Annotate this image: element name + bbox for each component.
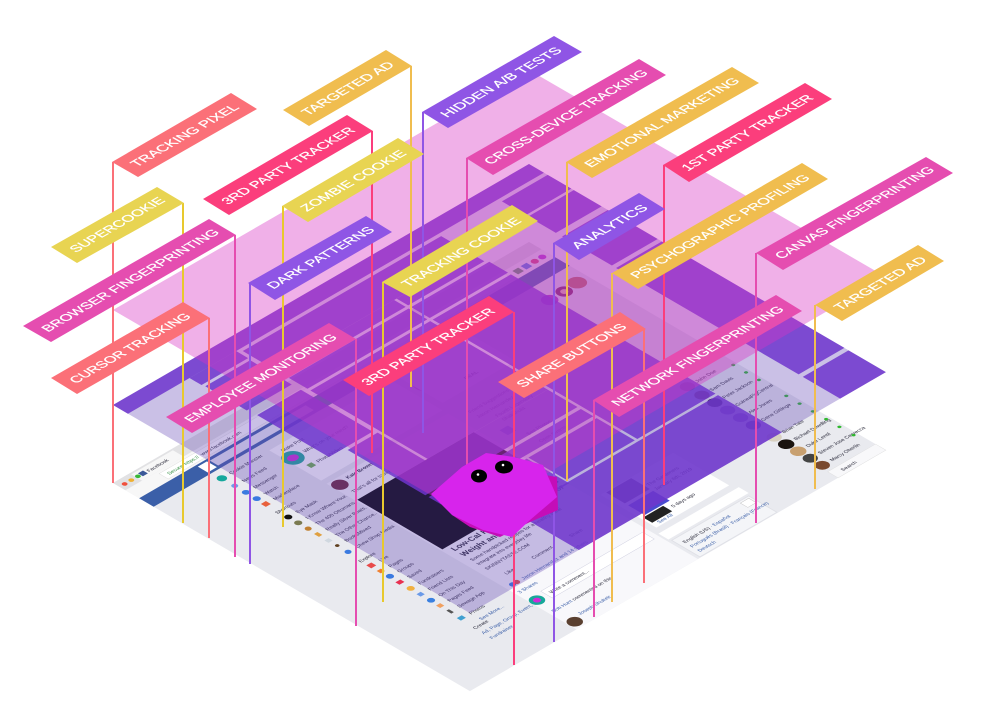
left navigation: Messenger xyxy=(252,474,280,490)
label: dark patterns xyxy=(248,216,392,300)
label: browser fingerprinting: BROWSER FINGERPRINTING xyxy=(38,227,223,334)
label: tracking pixel xyxy=(112,93,257,177)
right sidebar: stories and contacts: Gene Gittinge xyxy=(760,403,793,422)
top layer: translucent pink plane xyxy=(113,70,886,518)
label: analytics: ANALYTICS xyxy=(567,202,652,251)
label: cross-device tracking xyxy=(466,59,666,175)
left navigation: The 400 Ottomans xyxy=(314,501,358,526)
left navigation: On This Day xyxy=(437,580,468,598)
right sidebar: stories and contacts: Bichael Dowdling xyxy=(793,418,833,441)
label: share buttons xyxy=(498,312,646,398)
middle layer: translucent wireframe with violet blocks xyxy=(113,164,886,613)
label: targeted ad top xyxy=(283,50,412,126)
left navigation: Live xyxy=(377,555,391,563)
right column cards: Português (Brasil) · Français (France) xyxy=(689,501,771,549)
left navigation xyxy=(214,447,547,641)
left navigation: Really Silver Boats... xyxy=(324,504,372,532)
label: 3rd party tracker top: 3RD PARTY TRACKER xyxy=(217,125,359,206)
label: psychographic profiling xyxy=(612,163,828,289)
label: 3rd party tracker lower xyxy=(343,296,514,396)
label: targeted ad right xyxy=(815,245,944,321)
label: canvas fingerprinting: CANVAS FINGERPRINTING xyxy=(771,164,938,261)
label: network fingerprinting xyxy=(593,295,802,417)
label: supercookie: SUPERCOOKIE xyxy=(65,195,169,254)
composer card: Make Post xyxy=(280,437,307,453)
label: 3rd party tracker top xyxy=(203,115,373,215)
right column cards: Open Events xyxy=(538,425,569,443)
left navigation: Groups xyxy=(396,562,417,574)
post card with dark image: Comment xyxy=(530,545,556,560)
facebook blue bar xyxy=(139,257,570,507)
label: emotional marketing: EMOTIONAL MARKETING xyxy=(580,75,743,169)
right column cards: Jason Hernandez xyxy=(475,395,517,419)
post card with dark image xyxy=(326,413,698,630)
composer card: Photo/Video xyxy=(315,446,345,464)
connector lines from labels down to the page xyxy=(113,66,815,665)
right column cards: 5 days ago xyxy=(670,493,698,509)
label: 3rd party tracker lower: 3RD PARTY TRACKER xyxy=(357,306,499,387)
left navigation: Fundraiser xyxy=(489,624,516,640)
label: zombie cookie: ZOMBIE COOKIE xyxy=(296,148,410,213)
label: tracking cookie xyxy=(382,205,538,297)
label: targeted ad right: TARGETED AD xyxy=(830,254,930,312)
post card with dark image: Write a comment... xyxy=(548,570,591,595)
right column cards: Friend Suggestions xyxy=(467,388,512,414)
left navigation: Shortcuts xyxy=(274,501,299,515)
right column cards xyxy=(393,331,781,557)
right sidebar: stories and contacts: Peter Jackson xyxy=(721,380,755,400)
right column cards: See Photos xyxy=(525,419,554,436)
label: hidden a/b tests xyxy=(422,36,582,128)
left navigation: Chew Shop Media xyxy=(354,525,397,549)
right column cards: The Gardeners xyxy=(646,466,682,487)
label: emotional marketing xyxy=(566,67,759,178)
right sidebar: stories and contacts: Duke Lentil xyxy=(805,432,833,448)
right column cards: See All xyxy=(656,513,675,525)
right sidebar: stories and contacts: GuineaPigCentral xyxy=(734,383,775,407)
right column cards: Shakahula xyxy=(501,406,527,422)
right sidebar: stories and contacts: Search xyxy=(840,461,859,472)
label: employee monitoring xyxy=(166,323,356,433)
left navigation: Pages Feed xyxy=(446,586,476,603)
right sidebar: stories and contacts: Alex Jones xyxy=(747,399,775,415)
left navigation: Saved xyxy=(406,569,424,580)
label: analytics xyxy=(553,193,665,260)
post card with dark image: Weight and Still Taste Great xyxy=(458,499,559,558)
label: canvas fingerprinting xyxy=(756,157,953,270)
browser chrome xyxy=(113,242,555,498)
right sidebar: stories and contacts: Sam Davis xyxy=(708,376,736,392)
left navigation: See More... xyxy=(478,605,507,621)
browser chrome: www.facebook.com xyxy=(199,431,244,457)
label: targeted ad top: TARGETED AD xyxy=(297,59,398,117)
left navigation: Pages xyxy=(387,558,406,569)
label: hidden a/b tests: HIDDEN A/B TESTS xyxy=(436,45,566,119)
label: tracking pixel: TRACKING PIXEL xyxy=(126,102,243,169)
browser chrome: Facebook xyxy=(146,458,171,473)
composer card: What's on your mind? xyxy=(302,425,351,454)
post card with dark image: Bob Hunt commented on this xyxy=(551,576,615,613)
label: browser fingerprinting xyxy=(23,219,236,342)
post card with dark image: SKINNYTASTE.COM xyxy=(484,543,532,571)
post card with dark image: Integrate into everyday life xyxy=(475,532,534,566)
left navigation: Photos xyxy=(468,604,488,616)
post card with dark image: Joseph Shukeir xyxy=(577,595,614,616)
left navigation: Watch xyxy=(263,486,281,496)
left navigation: Eye Mask xyxy=(294,500,320,514)
left navigation: Fundraisers xyxy=(417,569,446,586)
post card with dark image: Share xyxy=(568,528,585,538)
right column cards: Fourth Legendary xyxy=(494,394,536,418)
composer card xyxy=(266,366,468,482)
left navigation: Friend Lists xyxy=(427,575,456,592)
left navigation: Cookie Monster xyxy=(228,454,265,476)
label: zombie cookie xyxy=(282,138,424,222)
post card with dark image: Low-Cal Kid-Friendly Dinners for xyxy=(449,483,567,552)
labels xyxy=(23,36,953,433)
left navigation: News Feed xyxy=(241,467,269,483)
left navigation: The Other Chance... xyxy=(334,511,381,538)
browser chrome: https:// xyxy=(183,455,202,466)
left navigation: BooksMixed xyxy=(343,526,373,543)
left navigation: Marketplace xyxy=(272,484,302,501)
label: 1st party tracker: 1ST PARTY TRACKER xyxy=(677,92,817,173)
left navigation: Create xyxy=(472,620,491,631)
right sidebar: stories and contacts: John Doe xyxy=(694,369,719,384)
label: share buttons: SHARE BUTTONS xyxy=(512,321,631,389)
post card with dark image: Like xyxy=(503,568,517,576)
label: tracking cookie: TRACKING COOKIE xyxy=(397,215,525,289)
left navigation: Explore xyxy=(357,552,378,564)
post card with dark image: Kate Brown xyxy=(345,462,375,480)
label: dark patterns: DARK PATTERNS xyxy=(263,224,378,291)
right sidebar: stories and contacts: Brian Tate xyxy=(781,419,806,434)
label: psychographic profiling: PSYCHOGRAPHIC PROFILING xyxy=(626,172,814,280)
base layer: browser page screenshot xyxy=(113,237,895,691)
post card with dark image: That's all for today xyxy=(351,469,393,494)
post card with dark image: 3 Shares xyxy=(517,581,540,595)
label: cursor tracking: CURSOR TRACKING xyxy=(65,311,195,385)
post card with dark image: Some handpicked recipes for a healthy meal xyxy=(469,507,564,562)
right column cards: January 6th, 2019 xyxy=(653,467,695,491)
right sidebar: stories and contacts: Marcy Oberlin xyxy=(829,443,862,462)
left navigation: I Know Where Your... xyxy=(304,493,352,520)
label: cross-device tracking: CROSS-DEVICE TRACKING xyxy=(480,67,652,166)
right column cards: English (US) · Español xyxy=(682,515,733,544)
label: network fingerprinting: NETWORK FINGERPRINTING xyxy=(607,304,788,408)
icon: magenta blob creature xyxy=(431,453,558,537)
right sidebar: stories and contacts xyxy=(530,267,895,480)
label: cursor tracking xyxy=(51,302,210,394)
browser chrome: Secure xyxy=(166,464,186,476)
post card with dark image: Jason Hernandez and 14 others xyxy=(520,540,591,581)
label: 1st party tracker xyxy=(663,83,832,182)
right column cards: Deutsch xyxy=(697,540,718,553)
left navigation: Ad, Page, Group, Event, xyxy=(480,604,535,635)
right sidebar: stories and contacts: Steven Jose Cervecca xyxy=(817,426,868,455)
label: supercookie xyxy=(51,187,184,263)
left navigation: Sewage App xyxy=(456,591,487,609)
label: employee monitoring: EMPLOYEE MONITORING xyxy=(180,332,341,424)
right column cards: DEAL xyxy=(463,370,481,381)
